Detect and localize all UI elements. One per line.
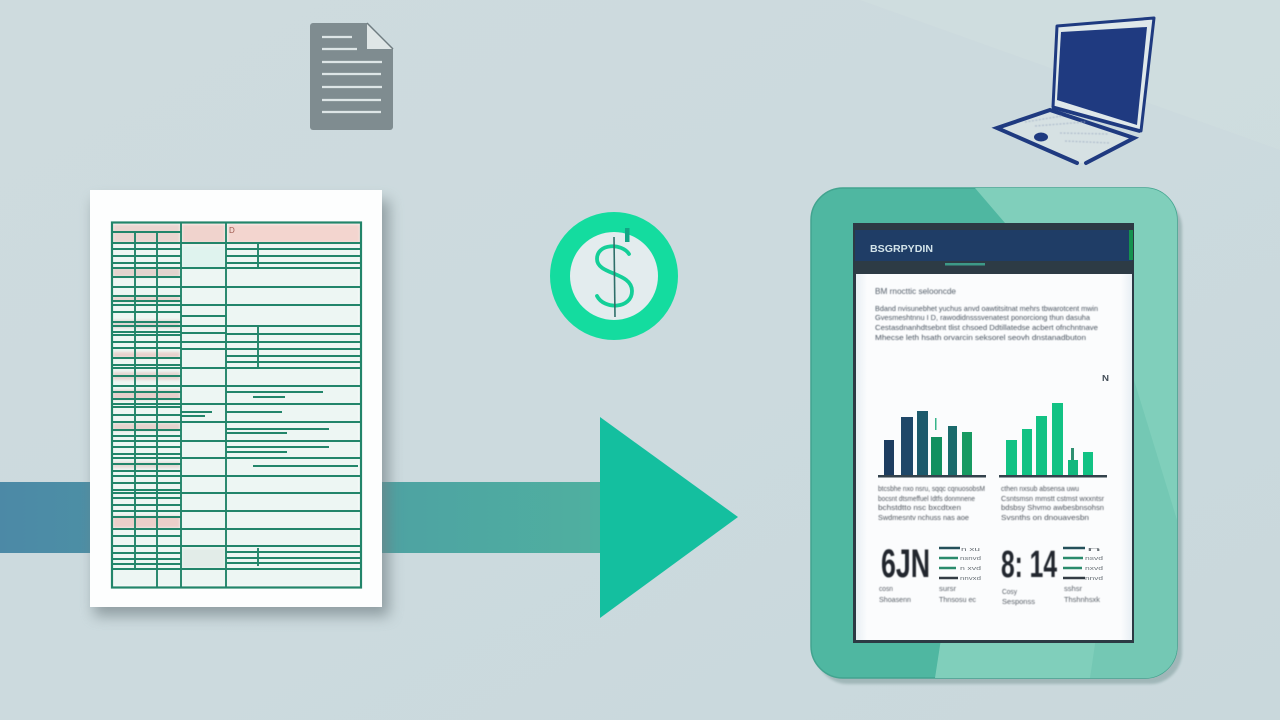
table tint and highlighted cells: [113, 224, 360, 586]
stat: right: nsvd: [1085, 556, 1103, 562]
caption: left chart: [878, 484, 985, 522]
caption: left chart: btcsbhe nxo nsru, sqqc cqnuosobsM: [878, 484, 985, 493]
caption: left chart: Swdmesntv nchuss nas aoe: [878, 513, 969, 522]
stat: right: [1001, 544, 1103, 606]
cell mark: D: [229, 226, 235, 235]
stat: right: n: [1087, 547, 1101, 553]
stat: left: nsnvd: [960, 556, 981, 562]
report header: [855, 230, 1133, 274]
arrow: process flow: [0, 417, 738, 618]
stat: right: Sesponss: [1002, 599, 1036, 606]
report intro text: BM rnocttic selooncde: [875, 287, 957, 296]
icon: document: [310, 23, 393, 130]
report intro text: Cestasdnanhdtsebnt tlist chsoed Ddtillatedse acbert ofnchntnave: [875, 323, 1098, 332]
stat: right: nnvd: [1085, 576, 1103, 582]
icon: laptop: [997, 18, 1154, 163]
stat: left: Shoasenn: [879, 597, 911, 604]
panel: spreadsheet page: [90, 190, 389, 616]
bar chart: left: [878, 411, 986, 478]
report intro text: Mhecse leth hsath orvarcin seksorel seovh dnstanadbuton: [875, 333, 1086, 342]
stat: right: nxvd: [1085, 566, 1103, 572]
icon: dollar coin: [560, 222, 668, 330]
stat: left: cosn: [879, 586, 893, 593]
stat: left: Thnsosu ec: [939, 597, 977, 604]
caption: right chart: cthen nxsub absensa uwu: [1001, 484, 1079, 493]
report intro text: [875, 287, 1098, 342]
caption: right chart: Svsnths on dnouavesbn: [1001, 513, 1089, 522]
report header: BSGRPYDIN: [870, 244, 933, 255]
report intro text: Gvesmeshtnnu I D, rawodidnsssvenatest ponorciong thun dasuha: [875, 313, 1091, 322]
caption: left chart: bchstdtto nsc bxcdtxen: [878, 503, 961, 512]
bar chart: right: [999, 403, 1107, 478]
stat: left: 6JN: [881, 542, 930, 586]
panel: tablet report: [811, 188, 1182, 684]
small mark: N: [1102, 374, 1109, 383]
stat: left: n xu: [961, 547, 980, 553]
report intro text: Bdand nvisunebhet yuchus anvd oawtitsitnat mehrs tbwarotcent mwin: [875, 304, 1098, 313]
stat: left: [879, 542, 981, 604]
stat: right: 8: 14: [1001, 544, 1057, 586]
stat: left: n xvd: [960, 566, 981, 572]
stat: right: sshsr: [1064, 586, 1083, 593]
stat: left: nnvxd: [960, 576, 981, 582]
stat: left: sursr: [939, 586, 957, 593]
caption: right chart: bdsbsy Shvmo awbesbnsohsn: [1001, 503, 1104, 512]
caption: right chart: [1001, 484, 1104, 522]
stat: right: Thshnhsxk: [1064, 597, 1101, 604]
stat: right: Cosy: [1002, 589, 1017, 596]
caption: left chart: bocsnt dtsmeffuel Idtfs donmnene: [878, 494, 975, 503]
table grid: [111, 222, 361, 588]
caption: right chart: Csntsmsn mmstt cstmst wxxntsr: [1001, 494, 1104, 503]
